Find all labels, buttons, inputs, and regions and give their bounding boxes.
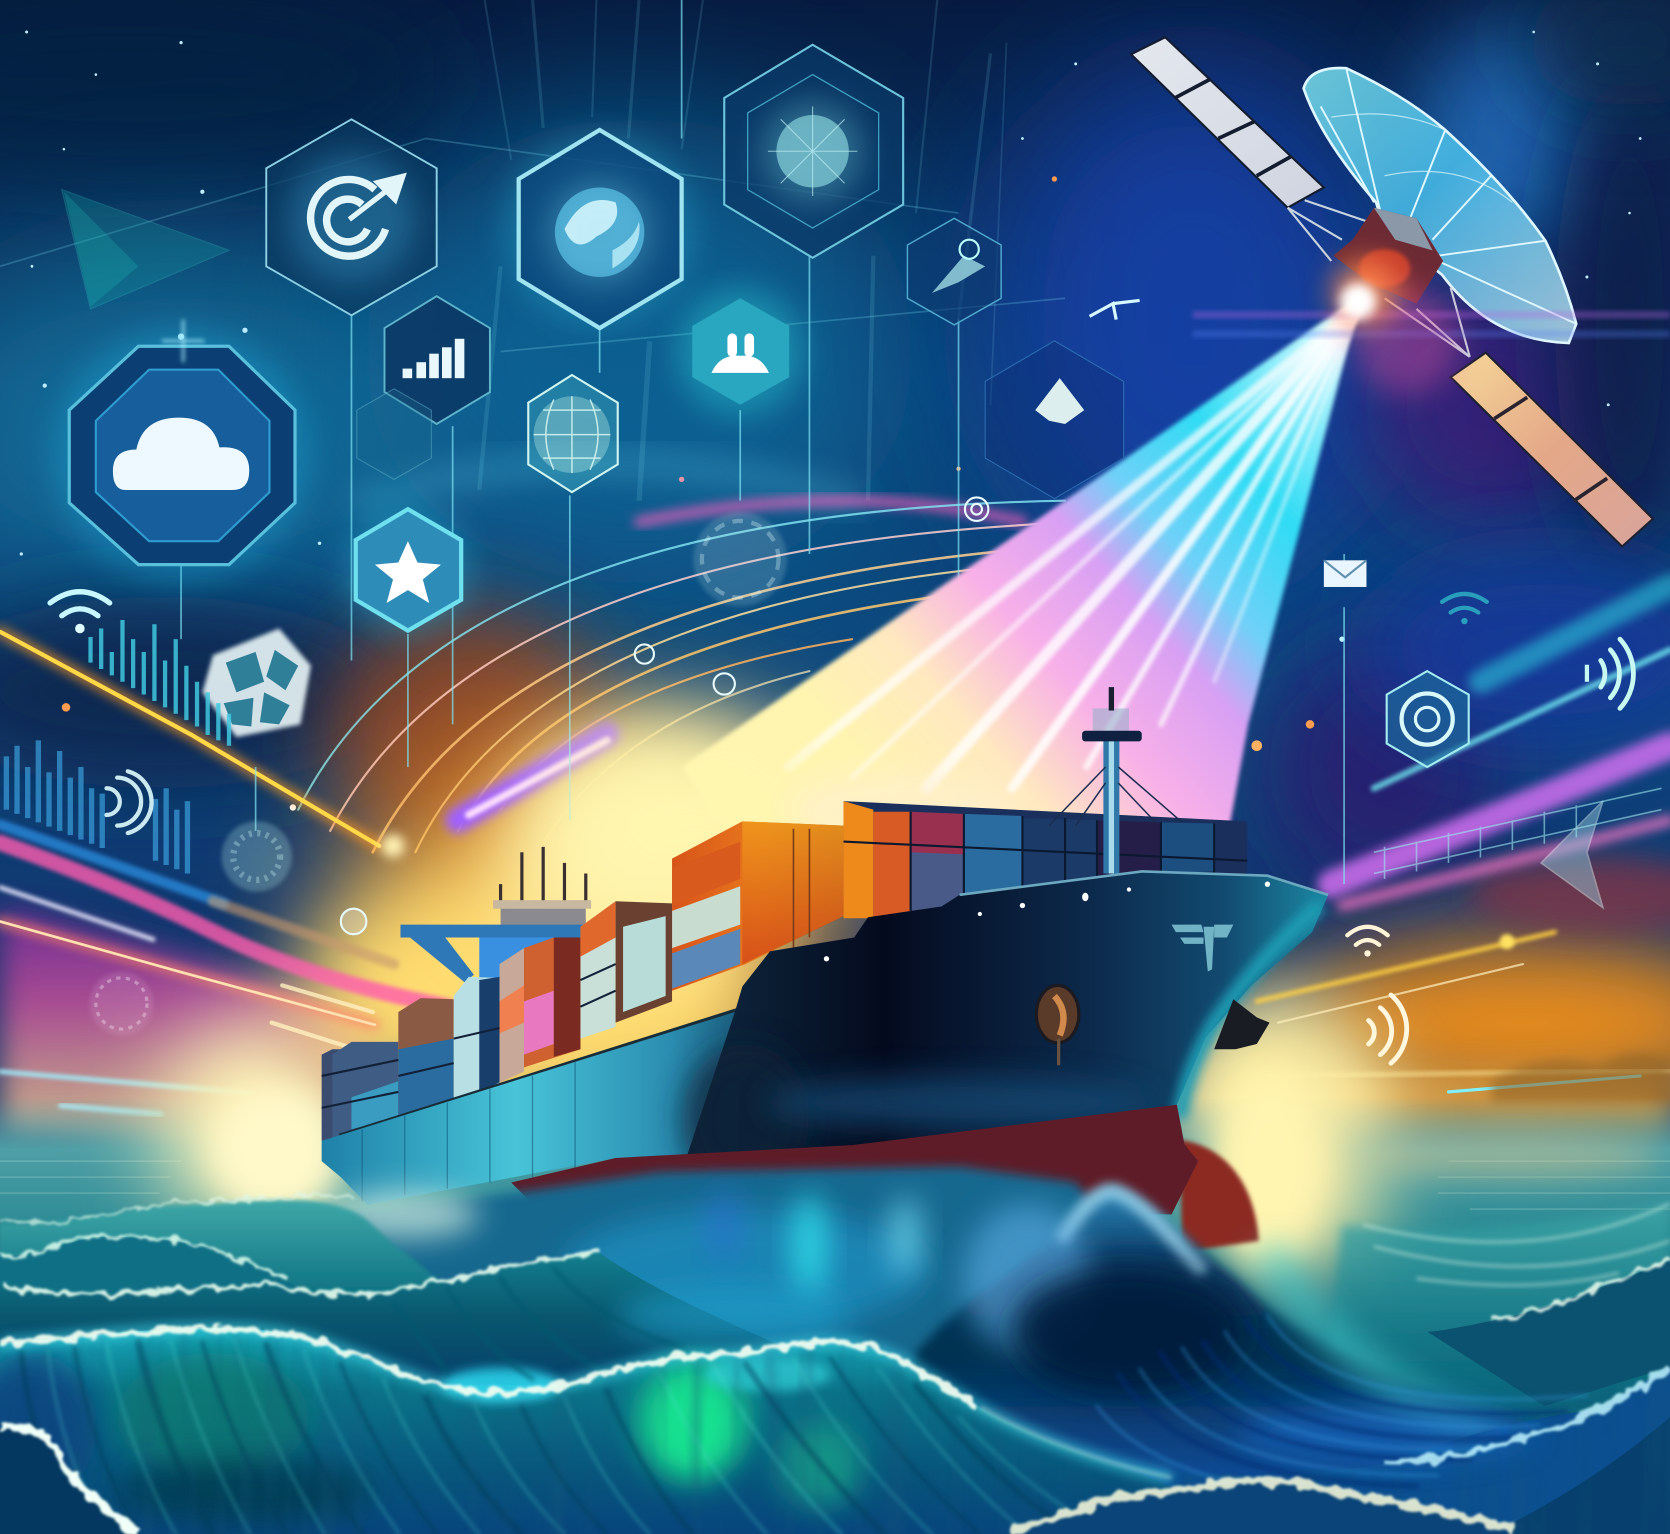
beam of light from satellite [554,294,1362,916]
hexagon: teal user icon [676,288,804,415]
hexagon: bar chart [384,296,490,424]
curved wave streaks [21,1268,1587,1534]
signal icon right low [1369,995,1407,1063]
faint hexagon left of globe [357,389,431,479]
dish [1304,68,1576,343]
small circular badges [341,497,988,934]
hull stern teal [322,1012,809,1205]
satellite body [1333,208,1443,304]
wifi icon right mid [1347,927,1388,957]
bow wave dark [873,1187,1544,1534]
hull dark bow [682,871,1328,1214]
hexagon: star badge [344,506,472,634]
blue swell lower right [1065,1367,1670,1534]
lower hull blue sheen [767,1077,1150,1128]
hull dark fade into teal [682,1044,809,1193]
right foam sweep [1385,1367,1670,1464]
wifi icon right top [1442,594,1487,624]
octagon: cloud icon [53,320,309,584]
railing right [1374,788,1661,879]
hexagon: target icon [266,119,437,315]
small drone glyph [1090,300,1140,320]
foreground crest left [0,1427,138,1534]
satellite [1131,37,1670,546]
solar panel lower [1451,353,1653,546]
bow highlight edge [960,871,1328,895]
hull plating lines [362,1062,575,1202]
foreground crest right [1012,1481,1512,1534]
hexagon: radial network [724,45,903,258]
water mist at hull [320,1166,1150,1406]
signal icon right top [1585,639,1633,708]
struts [1288,200,1470,357]
audio level bars lower left [6,740,187,874]
audio level bars left [91,620,229,746]
front wave with green glow [0,1328,1257,1534]
sea base [0,1023,1670,1534]
teal crystal shape left [62,190,229,309]
light streaks right [1257,586,1670,1092]
emitter flare [1193,261,1670,394]
back wave left [0,1195,447,1385]
hexagon: right target emblem [1387,671,1469,767]
orange container stack [672,821,844,991]
stern container stacks [322,901,746,1141]
forward container stack [844,801,1247,918]
hexagon: small tools icon [907,218,1001,325]
anchor [1036,985,1079,1065]
deck lights [824,882,1270,961]
bulb fitting [1214,999,1270,1049]
vertical data lines [0,0,1344,884]
bridge tower [400,847,591,1003]
container ship [322,687,1328,1252]
hexagon: globe [504,130,695,328]
top light rays [479,0,1006,501]
middle wave crest [0,1251,873,1385]
hexagon: translucent globe [528,375,618,492]
waterline red [511,1105,1198,1214]
soft dark streak texture [148,1334,1468,1486]
signal icon left [107,771,152,833]
back wave peak left [0,1237,426,1385]
envelope icon [1324,554,1366,587]
stars and particles [20,30,1642,811]
main foam crest [0,1328,1172,1478]
light streaks left [0,632,607,1114]
paper plane icon [1541,801,1603,908]
mast [1049,687,1182,874]
solar panel upper [1131,37,1324,208]
bow teal glow [1180,905,1321,1119]
wifi icon left [50,592,110,633]
distant clouds right [1491,1053,1670,1103]
central yellow light burst [298,735,1374,1225]
back wave right [1310,1204,1670,1534]
data arcs [298,463,1108,852]
right wave basin [1427,1260,1670,1406]
faint hexagon right with shard icon [985,341,1124,499]
bow emblem [1172,925,1233,972]
red bulb [1180,1140,1259,1252]
shattered hexagon icon [202,629,311,737]
ghost data globes [89,512,787,1035]
